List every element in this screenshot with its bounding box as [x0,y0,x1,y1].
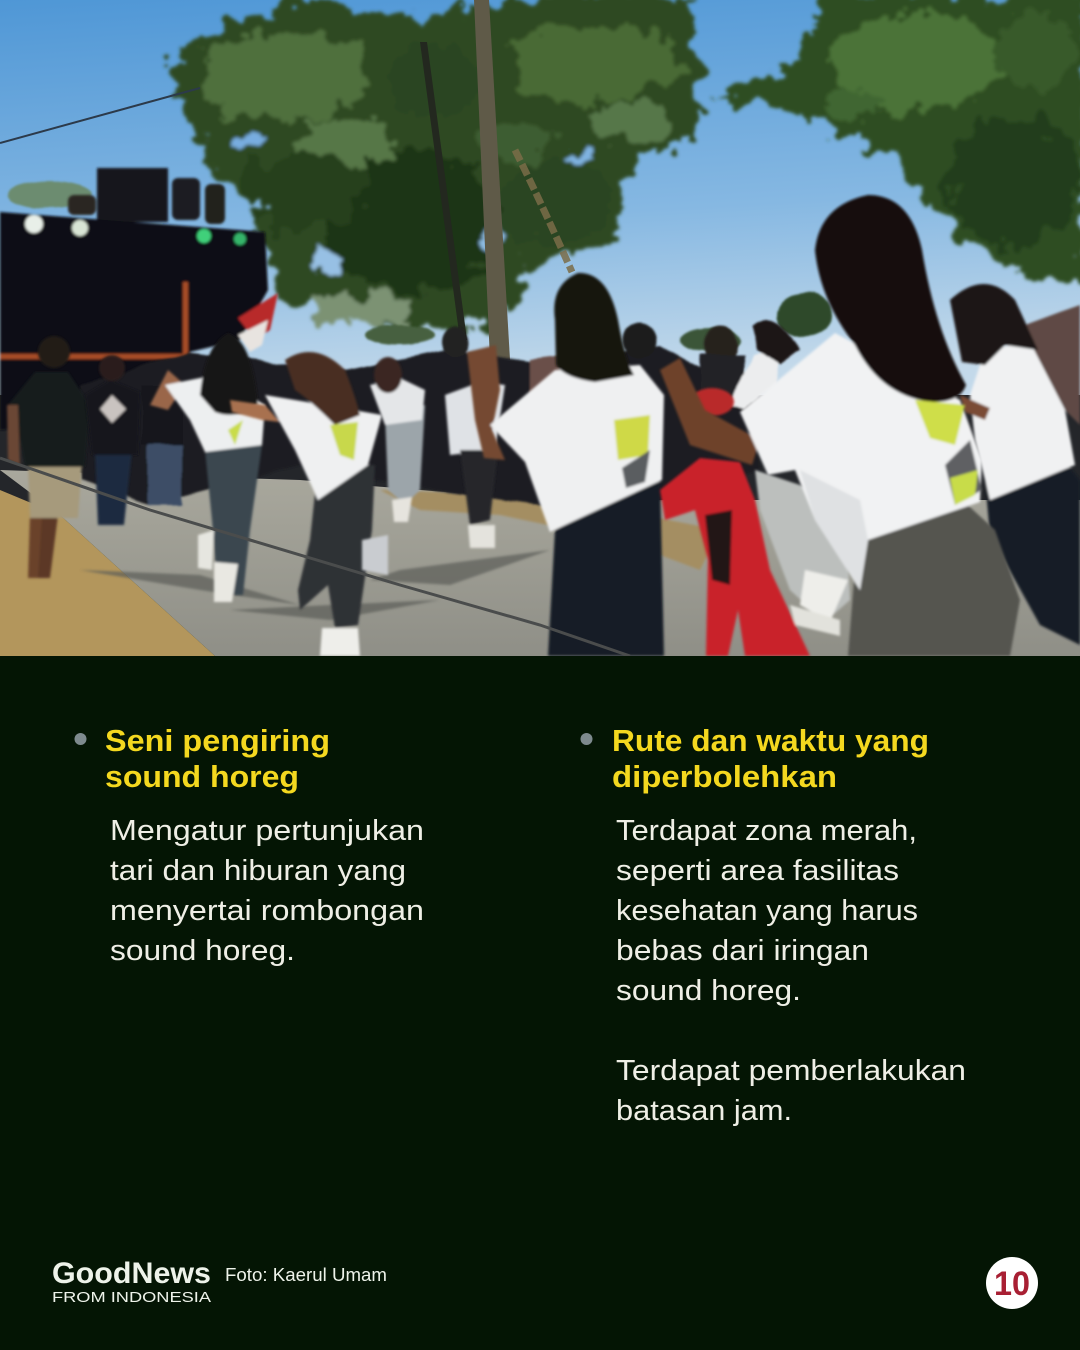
photo: dancers in white shirts marching beside a sound system [0,0,1080,656]
dancer in centre [467,273,664,656]
photo credit: Foto: Kaerul Umam [225,1265,387,1285]
ground: straw verge [0,490,215,656]
body text: menyertai rombongan [110,895,424,927]
dancer with curly hair [230,352,382,656]
body text: red zones [616,815,918,1007]
body text: red zones: sound horeg. [616,975,801,1007]
sky [0,0,1080,400]
logo: GoodNews from Indonesia [52,1257,211,1306]
crowd backdrop [80,319,800,505]
heading: Seni pengiring sound horeg: sound horeg [105,759,299,794]
central tree [174,0,699,332]
ground: straw centre [380,490,720,570]
utility poles and wire [0,0,572,360]
page number badge [986,1257,1038,1309]
body text: tari dan hiburan yang [110,855,406,887]
body text: red zones: kesehatan yang harus [616,895,918,927]
logo: GoodNews from Indonesia: FROM INDONESIA [52,1289,211,1306]
dancer with long hair [150,333,265,602]
body text: sound horeg. [110,935,295,967]
rope barrier [0,458,630,656]
bullet [74,733,86,745]
ground: road [0,470,1080,656]
logo: GoodNews from Indonesia: GoodNews [52,1257,211,1290]
bullet [580,733,592,745]
body text: time limits: Terdapat pemberlakukan [616,1055,966,1087]
road shadows [80,550,550,620]
panel: right column [580,723,966,1127]
body text: time limits: batasan jam. [616,1095,792,1127]
body text: red zones: Terdapat zona merah, [616,815,917,847]
panel: left column [74,723,424,967]
background dancers [362,357,505,575]
heading: Seni pengiring sound horeg [105,723,330,794]
sound system stage [0,168,278,430]
man in black shirt and shorts [7,336,90,578]
right tree [714,0,1080,287]
heading: Rute dan waktu yang diperbolehkan: diperbolehkan [612,759,837,794]
body text: Mengatur pertunjukan [110,815,424,847]
child in red costume [660,388,850,656]
heading: Rute dan waktu yang diperbolehkan [612,723,929,794]
body text: time limits [616,1055,966,1127]
heading: Seni pengiring sound horeg: Seni pengiring [105,723,330,758]
body text: red zones: seperti area fasilitas [616,855,899,887]
page number badge: 10 [994,1265,1030,1303]
dancer at far right [950,284,1080,645]
man in graphic tee [85,355,140,525]
heading: Rute dan waktu yang diperbolehkan: Rute dan waktu yang [612,723,929,758]
body text [110,815,424,967]
large dancer in foreground [660,195,1020,656]
distant trees [8,181,833,352]
mid-ground base behind people [0,395,1080,502]
body text: red zones: bebas dari iringan [616,935,869,967]
